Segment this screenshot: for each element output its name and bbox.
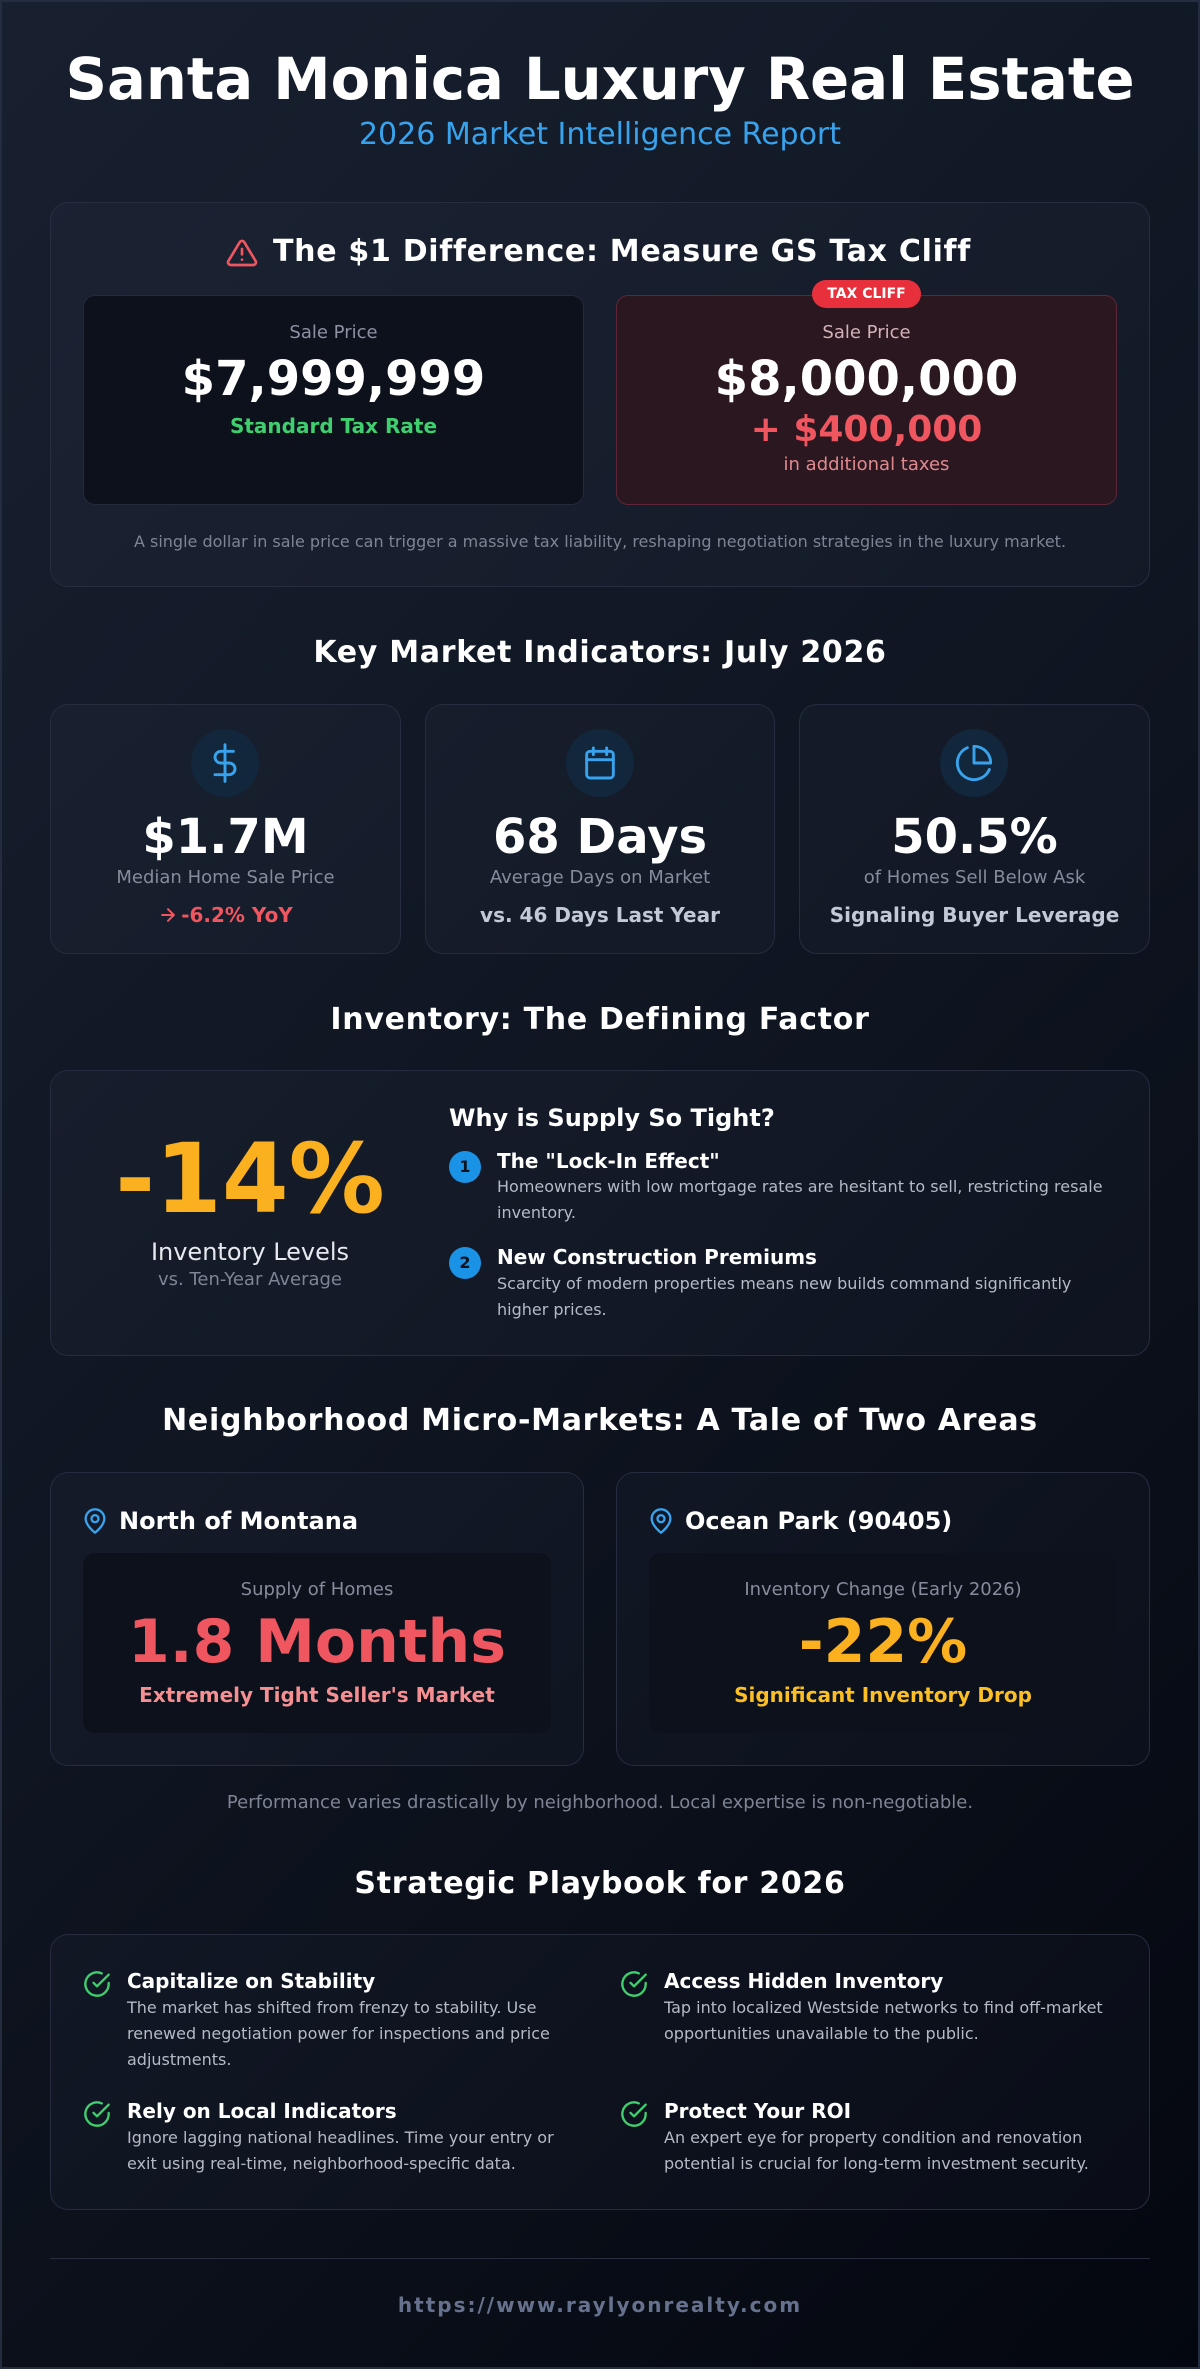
item title: Capitalize on Stability [127, 1969, 375, 1993]
panel: inventory [50, 1070, 1150, 1356]
stat box [649, 1553, 1117, 1733]
reason text: Scarcity of modern properties means new builds command significantly [497, 1274, 1071, 1292]
stat box [83, 1553, 551, 1733]
item text: opportunities unavailable to the public. [664, 2024, 979, 2042]
icon: dollar [191, 729, 259, 797]
item: protect your roi [621, 2099, 1089, 2172]
label: Sale Price [289, 322, 378, 343]
value: -22% [799, 1607, 967, 1677]
panel heading: The $1 Difference: Measure GS Tax Cliff [273, 234, 971, 269]
change: -6.2% YoY [181, 903, 293, 927]
item text [664, 1998, 1103, 2042]
icon: map pin [650, 1508, 672, 1534]
additional tax note: in additional taxes [784, 454, 949, 475]
reason text: higher prices. [497, 1300, 607, 1318]
icon: check circle [621, 1971, 647, 1997]
reason 2 [449, 1245, 1071, 1318]
footer url: https://www.raylyonrealty.com [398, 2293, 802, 2317]
number badge [449, 1247, 481, 1279]
additional tax: + $400,000 [751, 409, 982, 450]
big stat: -14% [115, 1123, 385, 1235]
item: rely on local indicators [84, 2099, 554, 2172]
icon: calendar [566, 729, 634, 797]
item title: Rely on Local Indicators [127, 2099, 397, 2123]
section heading: playbook: Strategic Playbook for 2026 [354, 1866, 846, 1901]
verdict: Extremely Tight Seller's Market [139, 1683, 495, 1707]
icon: check circle [84, 1971, 110, 1997]
icon: check circle [621, 2101, 647, 2127]
stat label: Inventory Levels [151, 1238, 349, 1266]
item text: renewed negotiation power for inspections and price [127, 2024, 550, 2042]
comparison: vs. 46 Days Last Year [480, 903, 720, 927]
price: $7,999,999 [182, 351, 485, 407]
subtitle: 2026 Market Intelligence Report [359, 117, 841, 152]
item text [664, 2128, 1089, 2172]
card: tax cliff price [616, 295, 1117, 505]
item text [127, 2128, 554, 2172]
section heading: inventory: Inventory: The Defining Factor [330, 1002, 870, 1037]
label: Average Days on Market [490, 867, 710, 888]
title: Santa Monica Luxury Real Estate [66, 46, 1134, 113]
label: Sale Price [822, 322, 911, 343]
badge: tax cliff: TAX CLIFF [827, 286, 906, 302]
panel: tax cliff [50, 202, 1150, 587]
item title: Access Hidden Inventory [664, 1969, 943, 1993]
note: A single dollar in sale price can trigger a massive tax liability, reshaping negotiation strategies in the luxury market. [134, 532, 1066, 551]
icon: check circle [84, 2101, 110, 2127]
icon: map pin [84, 1508, 106, 1534]
reason text [497, 1177, 1103, 1222]
panel: ocean park [616, 1472, 1150, 1766]
label: Supply of Homes [241, 1579, 393, 1600]
kpi card: below ask [799, 704, 1150, 954]
reason title: New Construction Premiums [497, 1245, 817, 1269]
item text: potential is crucial for long-term investment security. [664, 2154, 1089, 2172]
reason text: inventory. [497, 1203, 576, 1222]
reason title: The "Lock-In Effect" [497, 1149, 720, 1173]
panel: playbook [50, 1934, 1150, 2210]
stat sublabel: vs. Ten-Year Average [158, 1269, 342, 1290]
number badge [449, 1151, 481, 1183]
reasons heading: Why is Supply So Tight? [449, 1104, 775, 1132]
item: access hidden inventory [621, 1969, 1103, 2042]
value: 1.8 Months [128, 1607, 506, 1677]
item text: An expert eye for property condition and renovation [664, 2128, 1082, 2146]
value: $1.7M [142, 809, 309, 865]
neighborhood note: Performance varies drastically by neighborhood. Local expertise is non-negotiable. [227, 1792, 973, 1813]
value: 50.5% [891, 809, 1058, 865]
label: Inventory Change (Early 2026) [744, 1579, 1022, 1600]
area name: North of Montana [119, 1507, 358, 1535]
reason 1 [449, 1149, 1103, 1222]
reason text [497, 1274, 1071, 1318]
reason text: Homeowners with low mortgage rates are hesitant to sell, restricting resale [497, 1177, 1103, 1196]
panel: north of montana [50, 1472, 584, 1766]
label: Median Home Sale Price [116, 867, 335, 888]
tax rate: Standard Tax Rate [230, 414, 437, 438]
badge: tax cliff [812, 280, 921, 308]
item text: exit using real-time, neighborhood-specific data. [127, 2154, 516, 2172]
price: $8,000,000 [715, 351, 1018, 407]
kpi card: days on market [425, 704, 775, 954]
item text: The market has shifted from frenzy to stability. Use [127, 1998, 536, 2016]
number badge: 2 [459, 1253, 471, 1272]
icon: warning triangle [226, 240, 258, 266]
item text: Tap into localized Westside networks to find off-market [664, 1998, 1103, 2016]
item text [126, 1998, 550, 2068]
value: 68 Days [493, 809, 707, 865]
area name: Ocean Park (90405) [685, 1507, 952, 1535]
item text: Ignore lagging national headlines. Time your entry or [127, 2128, 554, 2146]
kpi card: median price [50, 704, 401, 954]
number badge: 1 [459, 1157, 471, 1176]
verdict: Significant Inventory Drop [734, 1683, 1032, 1707]
section heading: neighborhoods: Neighborhood Micro-Markets: A Tale of Two Areas [162, 1403, 1038, 1438]
label: of Homes Sell Below Ask [864, 867, 1085, 888]
section heading: key market indicators: Key Market Indicators: July 2026 [313, 635, 887, 670]
icon: pie chart [940, 729, 1008, 797]
item title: Protect Your ROI [664, 2099, 851, 2123]
card: standard price [83, 295, 584, 505]
item text: adjustments. [127, 2050, 231, 2068]
signal: Signaling Buyer Leverage [830, 903, 1119, 927]
item: capitalize on stability [84, 1969, 550, 2068]
